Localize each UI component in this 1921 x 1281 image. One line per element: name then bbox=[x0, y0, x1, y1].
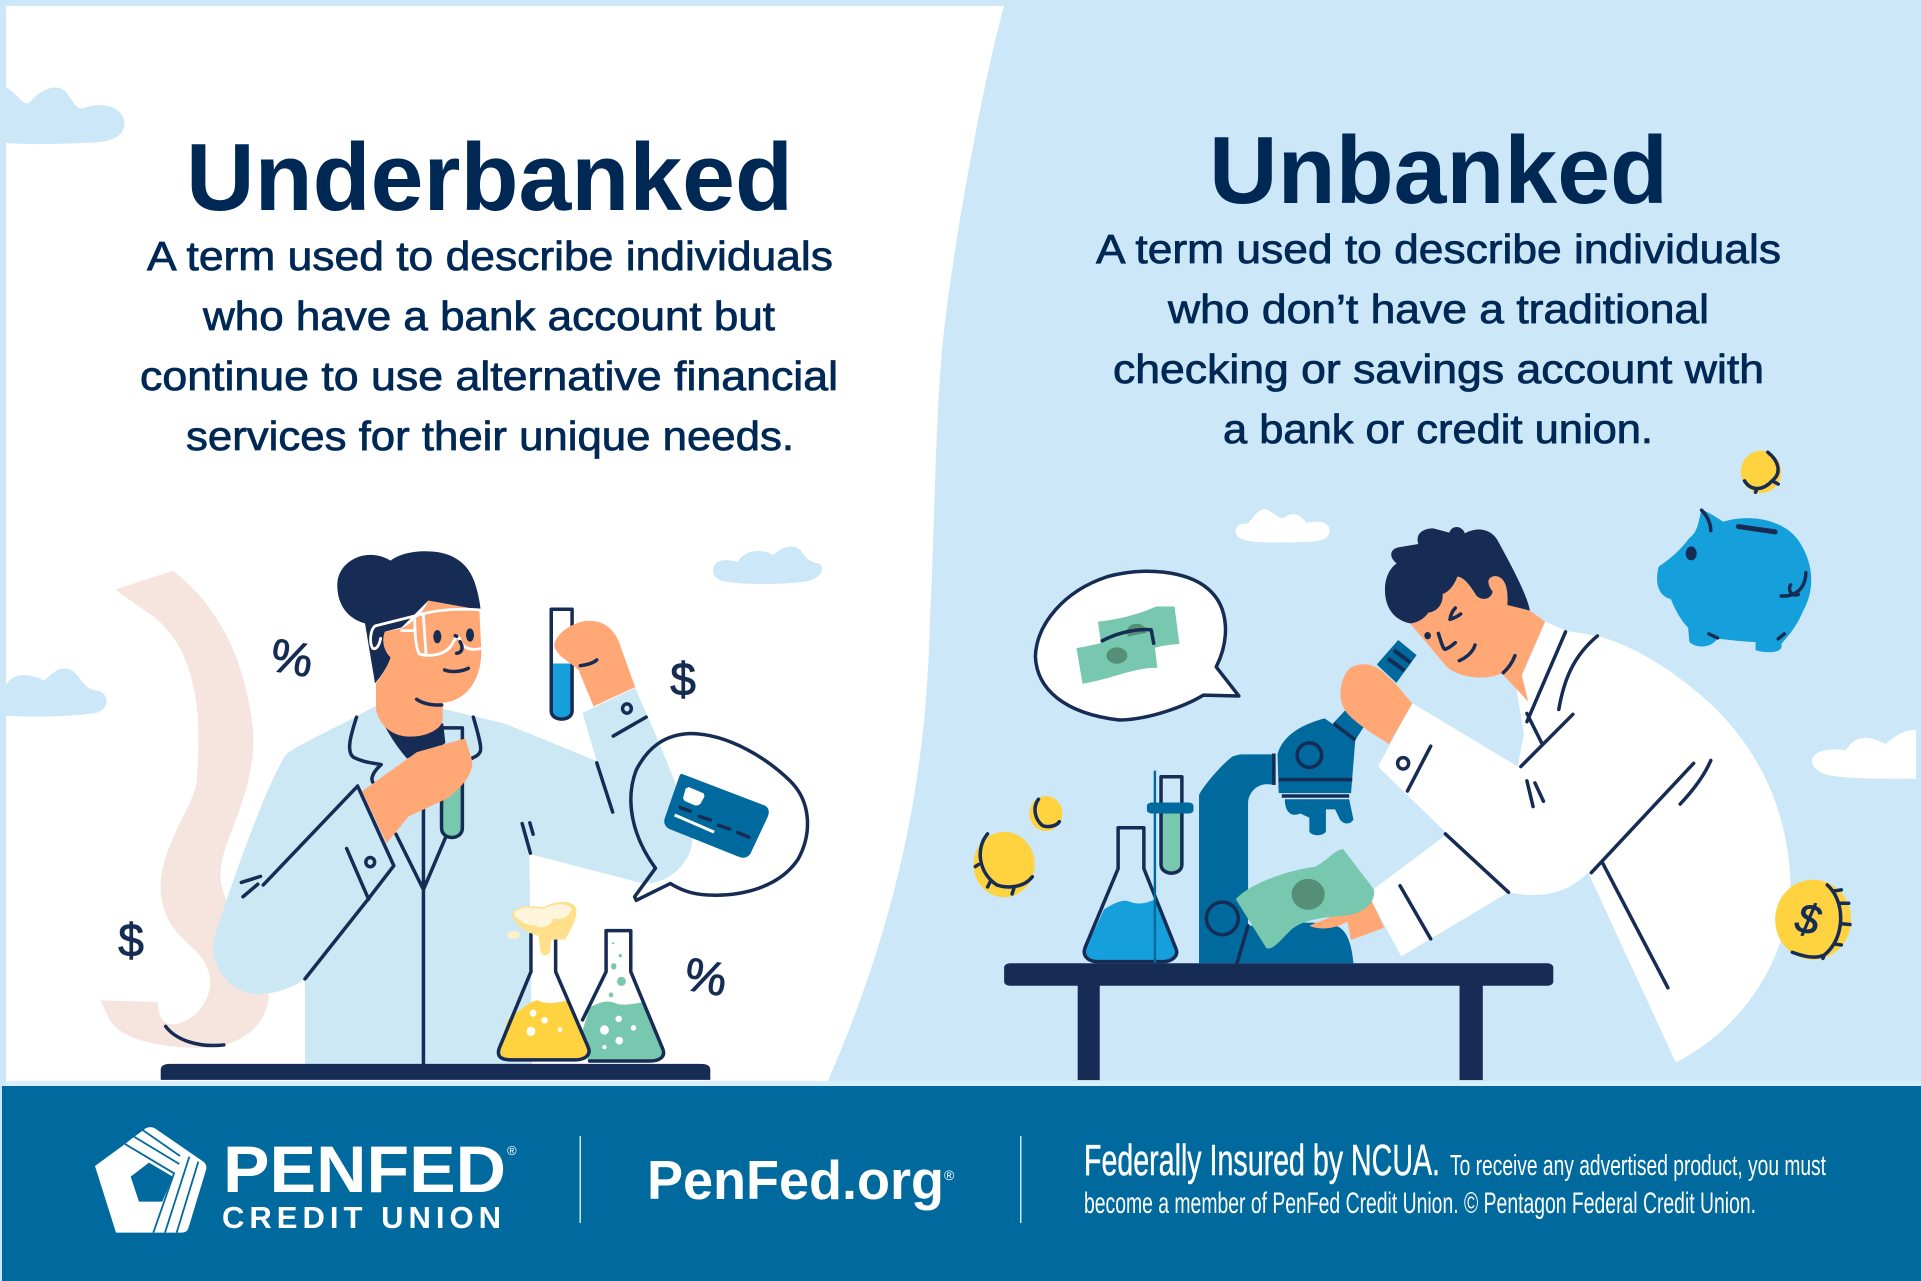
speech bubble bbox=[631, 734, 808, 900]
icon: credit card bbox=[664, 774, 769, 858]
text: dollar on coin: $ bbox=[1791, 893, 1825, 944]
coat details and lines bbox=[241, 660, 646, 1065]
shirt bbox=[377, 709, 445, 759]
table top bbox=[161, 1064, 710, 1080]
footer band bbox=[2, 1086, 1921, 1281]
table bbox=[1004, 963, 1553, 1080]
disclaimer: Federally Insured by NCUA. bbox=[1084, 1136, 1440, 1185]
text block: unbanked definition: a bank or credit union. bbox=[1223, 406, 1653, 452]
head bbox=[1385, 527, 1545, 702]
icon: coin top bbox=[1741, 451, 1781, 493]
flask blue bbox=[1084, 828, 1177, 962]
coat lines bbox=[1400, 632, 1711, 988]
foam bbox=[507, 902, 576, 955]
face and neck bbox=[1410, 576, 1545, 702]
test tube stand bbox=[1147, 771, 1194, 967]
cuff button bbox=[1398, 758, 1409, 769]
buttons bbox=[366, 704, 631, 867]
icon: cloud left bbox=[5, 668, 107, 717]
icon: speech bubble with cash bbox=[1035, 571, 1239, 720]
logo wordmark: CREDIT UNION bbox=[222, 1200, 501, 1235]
website: ® bbox=[944, 1167, 955, 1183]
hand on eyepiece bbox=[1340, 664, 1412, 744]
symbol: dollar lower: $ bbox=[118, 914, 144, 966]
icon: dollar coin bbox=[1775, 880, 1851, 960]
panel: white underbanked area with curved edge bbox=[6, 6, 1004, 1081]
hair bbox=[337, 551, 481, 683]
illustration: underbanked scientist bbox=[5, 547, 822, 1080]
icon: cloud right bbox=[713, 547, 822, 584]
microscope bbox=[1199, 640, 1417, 963]
text block: unbanked definition bbox=[1096, 226, 1781, 452]
text block: underbanked definition bbox=[140, 233, 838, 459]
hand under cash bbox=[1309, 901, 1384, 940]
goggles bbox=[371, 609, 482, 655]
receipt ribbon bbox=[100, 571, 269, 1048]
strip above footer bbox=[6, 1081, 1921, 1086]
symbol: percent lower: % bbox=[681, 947, 731, 1006]
receipt curl line bbox=[166, 1026, 224, 1046]
text block: unbanked definition: who don’t have a traditional bbox=[1167, 286, 1709, 332]
logo wordmark: PENFED bbox=[223, 1132, 506, 1206]
icon: white cloud bbox=[1236, 509, 1330, 543]
flask yellow bbox=[498, 934, 589, 1060]
heading: Underbanked: Underbanked bbox=[186, 124, 793, 231]
icon: white cloud right bbox=[1812, 730, 1916, 779]
icon: coin left small bbox=[1029, 796, 1062, 831]
test tube blue bbox=[551, 609, 572, 719]
face and neck bbox=[376, 601, 481, 737]
hand holding tube bbox=[362, 739, 472, 843]
symbol: percent upper: % bbox=[267, 628, 317, 687]
cash bill bbox=[1236, 849, 1374, 949]
eye bbox=[1424, 632, 1431, 639]
eyes bbox=[433, 628, 474, 643]
head bbox=[337, 551, 482, 737]
nose mouth chin bbox=[417, 636, 468, 705]
text block: underbanked definition: services for their unique needs. bbox=[186, 413, 794, 459]
disclaimer bbox=[1084, 1136, 1826, 1220]
text block: underbanked definition: A term used to describe individuals bbox=[147, 233, 833, 279]
face details bbox=[1438, 608, 1515, 673]
illustration: unbanked scientist bbox=[973, 451, 1916, 1080]
symbol: dollar upper: $ bbox=[670, 653, 696, 705]
flask green bbox=[583, 931, 664, 1061]
text block: underbanked definition: continue to use alternative financial bbox=[140, 353, 838, 399]
website: PenFed.org bbox=[647, 1149, 944, 1211]
lab coat bbox=[1372, 622, 1790, 1063]
text block: unbanked definition: checking or savings account with bbox=[1113, 346, 1764, 392]
icon: coin left large bbox=[973, 832, 1035, 897]
logo wordmark: ® bbox=[507, 1143, 517, 1158]
lab coat bbox=[213, 688, 692, 1065]
raised hand bbox=[554, 621, 635, 706]
test tube green bbox=[442, 728, 462, 837]
heading: Unbanked: Unbanked bbox=[1209, 117, 1668, 224]
icon: piggy bank bbox=[1657, 509, 1811, 652]
icon: cloud top left bbox=[6, 87, 124, 144]
logo mark bbox=[95, 1127, 206, 1233]
hair bbox=[1385, 527, 1530, 623]
text block: underbanked definition: who have a bank account but bbox=[202, 293, 776, 339]
text block: unbanked definition: A term used to describe individuals bbox=[1096, 226, 1781, 272]
logo wordmark bbox=[222, 1132, 517, 1235]
